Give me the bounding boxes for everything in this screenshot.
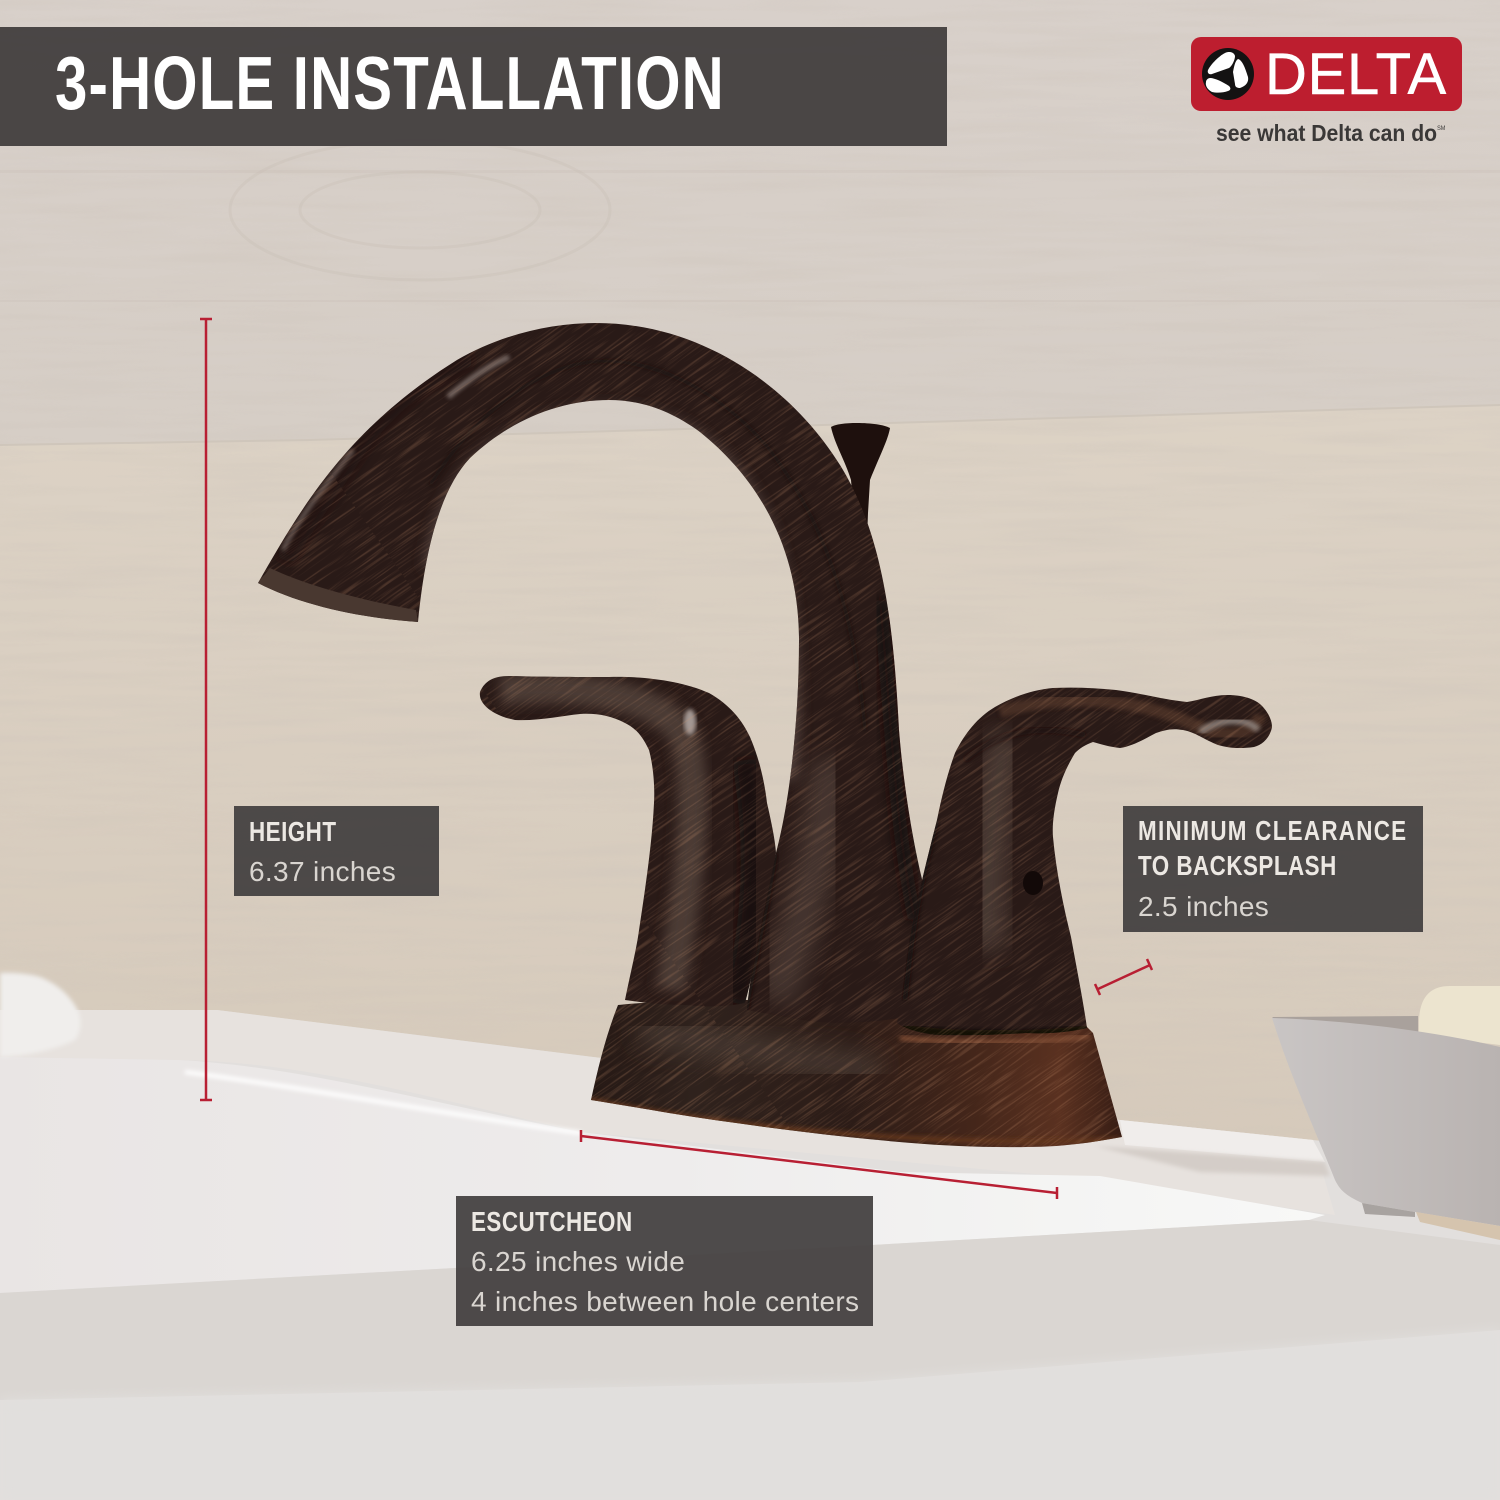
basin interior [0, 1057, 1325, 1293]
height dimension line [200, 318, 212, 1102]
escutcheon callout: 4 inches between hole centers [471, 1286, 859, 1317]
soap [1419, 986, 1500, 1045]
right handle [890, 685, 1275, 1040]
escutcheon base [585, 995, 1125, 1150]
escutcheon callout: ESCUTCHEON [471, 1206, 633, 1237]
wood grain texture [0, 0, 1500, 1150]
right sink highlights [1095, 1120, 1330, 1176]
clearance callout: 2.5 inches [1138, 891, 1269, 922]
lower sink surface [0, 1330, 1500, 1500]
logo: Delta: DELTA [1265, 42, 1447, 107]
pop-up drain knob [831, 423, 890, 565]
height callout: HEIGHT [249, 816, 337, 847]
spout and neck [255, 320, 930, 1025]
tagline: see what Delta can doSM [1216, 120, 1445, 146]
sink rim [0, 1010, 1335, 1215]
escutcheon callout: 6.25 inches wide [471, 1246, 685, 1277]
rim highlight [185, 1072, 581, 1133]
front band of sink [0, 1220, 1500, 1400]
sink surface [0, 1010, 1500, 1500]
clearance callout: MINIMUM CLEARANCE [1138, 815, 1407, 846]
clearance callout: TO BACKSPLASH [1138, 850, 1337, 881]
clearance dimension line [1094, 958, 1154, 996]
title: 3-HOLE INSTALLATION [55, 41, 725, 125]
title [0, 27, 947, 146]
left handle [475, 670, 780, 1010]
escutcheon callout [456, 1196, 873, 1326]
height callout: 6.37 inches [249, 856, 396, 887]
icon: Delta triangle [1202, 48, 1254, 100]
screw hole [1023, 871, 1043, 895]
faucet [255, 320, 1275, 1150]
logo: Delta [1191, 37, 1462, 111]
towel at left [0, 973, 80, 1057]
escutcheon dimension line [580, 1130, 1058, 1199]
soap dish [1272, 1016, 1500, 1240]
height callout [234, 806, 439, 896]
clearance callout [1123, 806, 1423, 932]
